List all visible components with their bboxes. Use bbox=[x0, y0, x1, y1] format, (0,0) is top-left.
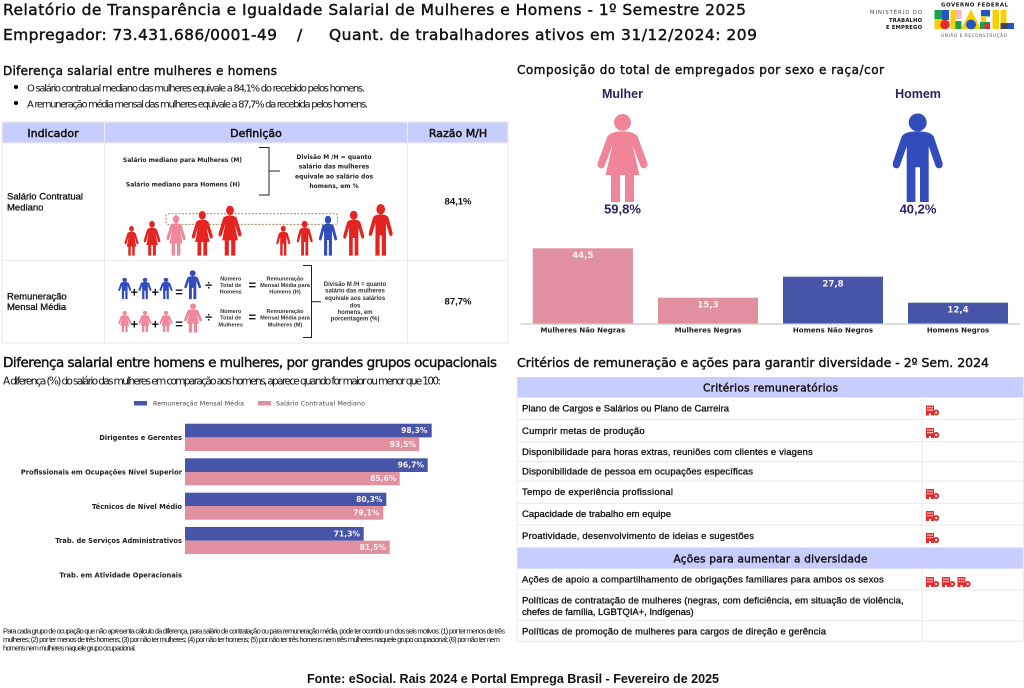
title bbox=[3, 1, 757, 44]
action rows bbox=[522, 574, 904, 638]
bar chart: composição por sexo e raça: Homens Não Negros bbox=[793, 326, 873, 334]
criteria rows: Proatividade, desenvolvimento de ideias e sugestões bbox=[522, 531, 754, 542]
bars: dirigentes e gerentes bbox=[99, 424, 432, 451]
bar chart: grupos ocupacionais bbox=[21, 424, 432, 580]
icon: man 40,2% bbox=[893, 87, 943, 216]
criteria rows: Plano de Cargos e Salários ou Plano de Carreira bbox=[522, 404, 730, 414]
action rows: Políticas de promoção de mulheres para cargos de direção e gerência bbox=[522, 626, 827, 638]
definition: salário mediano labels: Salário mediano para Homens (H) bbox=[126, 182, 240, 188]
formula: women average: + bbox=[152, 316, 160, 332]
row label: remuneração mensal média: Mensal Média bbox=[7, 302, 67, 313]
definition text: divisão M/H: equivale ao salário dos bbox=[295, 173, 373, 180]
logo: ministério do trabalho e emprego: MINISTÉRIO DO bbox=[870, 8, 922, 16]
formula: women average: = bbox=[175, 316, 183, 332]
definition text: divisão M/H remuneração: homens, em bbox=[337, 310, 373, 316]
action rows: chefes de família, LGBTQIA+, Indígenas) bbox=[522, 607, 694, 618]
formula: women average: Mulheres (M) bbox=[268, 322, 302, 328]
text block: bullets: A remuneração média mensal das mulheres equivale a 87,7% da recebida pelos homens. bbox=[27, 98, 368, 110]
text block: bullets: O salário contratual mediano das mulheres equivale a 84,1% do recebido pelos homens. bbox=[27, 82, 365, 94]
label: atividade operacional: Trab. em Atividade Operacionais bbox=[59, 572, 182, 580]
bar chart: composição por sexo e raça: 44,5 bbox=[572, 251, 593, 261]
bars: serviços administrativos: 81,5% bbox=[360, 543, 386, 552]
icons: criteria markers bbox=[926, 406, 939, 543]
icon: man 40,2%: 40,2% bbox=[900, 202, 937, 216]
bar chart: composição por sexo e raça bbox=[520, 248, 1020, 334]
criteria rows: Disponibilidade para horas extras, reuniões com clientes e viagens bbox=[522, 447, 813, 458]
formula: men average: = bbox=[175, 284, 183, 300]
bars: serviços administrativos bbox=[55, 527, 390, 554]
icons: women salaries bbox=[124, 206, 242, 256]
definition: salário mediano labels bbox=[123, 157, 242, 188]
row label: salário contratual mediano: Mediano bbox=[7, 202, 43, 214]
action rows: Ações de apoio a compartilhamento de obrigações familiares para ambos os sexos bbox=[522, 574, 884, 586]
title: Quant. de trabalhadores ativos em 31/12/2024: 209 bbox=[329, 26, 757, 44]
bars: dirigentes e gerentes: Dirigentes e Gerentes bbox=[99, 434, 182, 442]
definition: salário mediano labels: Salário mediano para Mulheres (M) bbox=[123, 157, 242, 164]
title: Empregador: 73.431.686/0001-49 bbox=[3, 26, 277, 44]
legend: Remuneração Mensal Média bbox=[153, 400, 244, 408]
formula: women average: Número bbox=[220, 309, 241, 315]
bars: técnicos: Técnicos de Nível Médio bbox=[92, 503, 182, 511]
text block: subtitle: A diferença (%) do salário das mulheres em comparação aos homens, aparece quando for maior ou menor que 100: bbox=[3, 376, 441, 388]
heading: diferença salarial: Diferença salarial entre mulheres e homens bbox=[3, 64, 277, 78]
bars: serviços administrativos: 71,3% bbox=[334, 530, 360, 538]
value: 87,7%: 87,7% bbox=[445, 296, 472, 308]
dashed highlight bbox=[166, 214, 338, 224]
bars: profissionais: Profissionais em Ocupações Nível Superior bbox=[21, 468, 183, 476]
action rows: Políticas de contratação de mulheres (negras, com deficiência, em situação de violência, bbox=[522, 596, 904, 606]
table header bbox=[2, 122, 508, 143]
icon: woman 59,8% bbox=[597, 87, 648, 216]
formula: women average: Remuneração bbox=[266, 309, 304, 315]
icon: man 40,2%: Homem bbox=[895, 87, 941, 101]
formula: men average: Remuneração bbox=[266, 276, 304, 282]
heading: diferença por grupos ocupacionais: Diferença salarial entre homens e mulheres, por grandes grupos ocupacionais bbox=[3, 355, 497, 371]
table header: Definição bbox=[230, 127, 282, 140]
bar chart: composição por sexo e raça: Mulheres Não Negras bbox=[540, 326, 625, 334]
criteria rows: Tempo de experiência profissional bbox=[522, 487, 673, 498]
formula: men average: ÷ bbox=[205, 278, 212, 292]
bars: profissionais bbox=[21, 458, 428, 485]
value: 84,1%: 84,1% bbox=[445, 196, 472, 208]
logo: governo federal brasil: UNIÃO E RECONSTRUÇÃO bbox=[941, 32, 1008, 39]
formula: women average: Total de bbox=[220, 316, 241, 322]
logo: governo federal brasil bbox=[934, 2, 1014, 39]
formula: men average: = bbox=[249, 278, 257, 292]
title: / bbox=[297, 26, 303, 44]
formula: women average: ÷ bbox=[205, 310, 212, 324]
formula: women average: + bbox=[131, 316, 139, 332]
legend: Salário Contratual Mediano bbox=[276, 400, 365, 408]
icon: woman 59,8%: Mulher bbox=[602, 87, 643, 101]
legend bbox=[134, 400, 365, 408]
criteria rows: Cumprir metas de produção bbox=[522, 426, 645, 437]
text block: footnote: mulheres; (2) por ter menos de três homens; (3) por não ter mulheres; (4) por não ter homens; (5) por não ter três homens nem três mulheres naquele grupo ocupacional; (6) por não ter nem bbox=[3, 635, 500, 644]
formula: men average: + bbox=[152, 284, 160, 300]
logo: governo federal brasil: GOVERNO FEDERAL bbox=[941, 2, 1009, 8]
criteria rows: Disponibilidade de pessoa em ocupações específicas bbox=[522, 466, 753, 477]
row label: remuneração mensal média: Remuneração bbox=[7, 292, 67, 302]
criteria rows: Capacidade de trabalho em equipe bbox=[522, 509, 671, 520]
bars: técnicos bbox=[92, 493, 386, 520]
bracket bbox=[303, 266, 321, 338]
formula: men average: Homens bbox=[220, 290, 242, 296]
formula: women average: = bbox=[249, 310, 257, 324]
formula: men average: Mensal Média para bbox=[260, 283, 311, 289]
text block: bullets bbox=[14, 82, 368, 110]
definition text: divisão M/H: Divisão M /H = quanto bbox=[296, 154, 372, 161]
text block: footnote: homens nem mulheres naquele grupo ocupacional. bbox=[3, 644, 136, 652]
logo: ministério do trabalho e emprego: TRABALHO bbox=[889, 18, 923, 24]
bars: técnicos: 80,3% bbox=[356, 495, 383, 504]
table header: Razão M/H bbox=[429, 127, 487, 140]
text block: footnote bbox=[3, 626, 505, 652]
bars: profissionais: 85,6% bbox=[370, 474, 397, 483]
bar chart: composição por sexo e raça: 27,8 bbox=[822, 279, 844, 289]
definition text: divisão M/H remuneração: porcentagem (%) bbox=[331, 317, 379, 323]
bracket bbox=[259, 148, 280, 195]
icon: woman 59,8%: 59,8% bbox=[604, 202, 641, 216]
logo: ministério do trabalho e emprego bbox=[870, 8, 923, 31]
formula: men average: Homens (H) bbox=[269, 290, 301, 296]
bars: técnicos: 79,1% bbox=[353, 508, 380, 518]
definition text: divisão M/H: homens, em % bbox=[309, 183, 359, 190]
section header: critérios remuneratórios: Critérios remuneratórios bbox=[703, 382, 838, 394]
panel: indicator table bbox=[2, 122, 508, 343]
bars: profissionais: 96,7% bbox=[398, 460, 424, 470]
row label: salário contratual mediano: Salário Contratual bbox=[7, 192, 83, 202]
bars: dirigentes e gerentes: 98,3% bbox=[401, 426, 428, 435]
definition text: divisão M/H remuneração: salário das mulheres bbox=[325, 289, 386, 295]
formula: women average: Mulheres bbox=[218, 322, 243, 328]
definition text: divisão M/H remuneração: dos bbox=[350, 303, 361, 309]
formula: men average bbox=[118, 270, 311, 300]
bar chart: composição por sexo e raça: 12,4 bbox=[947, 305, 969, 315]
logo: ministério do trabalho e emprego: E EMPREGO bbox=[886, 25, 923, 31]
icons: action markers bbox=[926, 577, 971, 587]
panel: criteria table bbox=[517, 377, 1024, 642]
bar chart: composição por sexo e raça: Mulheres Negras bbox=[675, 326, 741, 334]
definition text: divisão M/H remuneração: equivale aos salários bbox=[325, 296, 386, 302]
heading: composição: Composição do total de empregados por sexo e raça/cor bbox=[517, 63, 884, 77]
title: Relatório de Transparência e Igualdade Salarial de Mulheres e Homens - 1º Semestre 2025 bbox=[3, 1, 746, 19]
definition text: divisão M/H: salário das mulheres bbox=[299, 164, 370, 171]
heading: critérios de remuneração: Critérios de remuneração e ações para garantir diversidade - 2º Sem. 2024 bbox=[517, 355, 989, 370]
section header: ações para aumentar a diversidade: Ações para aumentar a diversidade bbox=[674, 553, 868, 565]
formula: men average: Número bbox=[220, 276, 241, 282]
icons: men salaries bbox=[276, 204, 393, 256]
formula: women average bbox=[118, 303, 311, 332]
formula: men average: + bbox=[131, 284, 139, 300]
definition text: divisão M/H remuneração: Divisão M /H = quanto bbox=[324, 282, 386, 288]
formula: men average: Total de bbox=[220, 283, 241, 289]
criteria rows bbox=[522, 404, 813, 542]
table header: Indicador bbox=[27, 127, 79, 140]
source note: Fonte: eSocial. Rais 2024 e Portal Emprega Brasil - Fevereiro de 2025 bbox=[307, 671, 719, 686]
text block: footnote: Para cada grupo de ocupação que não apresenta cálculo da diferença, para salário de contratação ou para remuneração média, pode ter ocorrido um dos seis motivos: (1) por ter menos de três bbox=[3, 626, 505, 636]
bar chart: composição por sexo e raça: 15,3 bbox=[697, 300, 719, 310]
formula: women average: Mensal Média para bbox=[260, 316, 311, 322]
bars: serviços administrativos: Trab. de Serviços Administrativos bbox=[55, 537, 182, 545]
bar chart: composição por sexo e raça: Homens Negros bbox=[927, 326, 989, 334]
bars: dirigentes e gerentes: 93,5% bbox=[390, 440, 416, 449]
